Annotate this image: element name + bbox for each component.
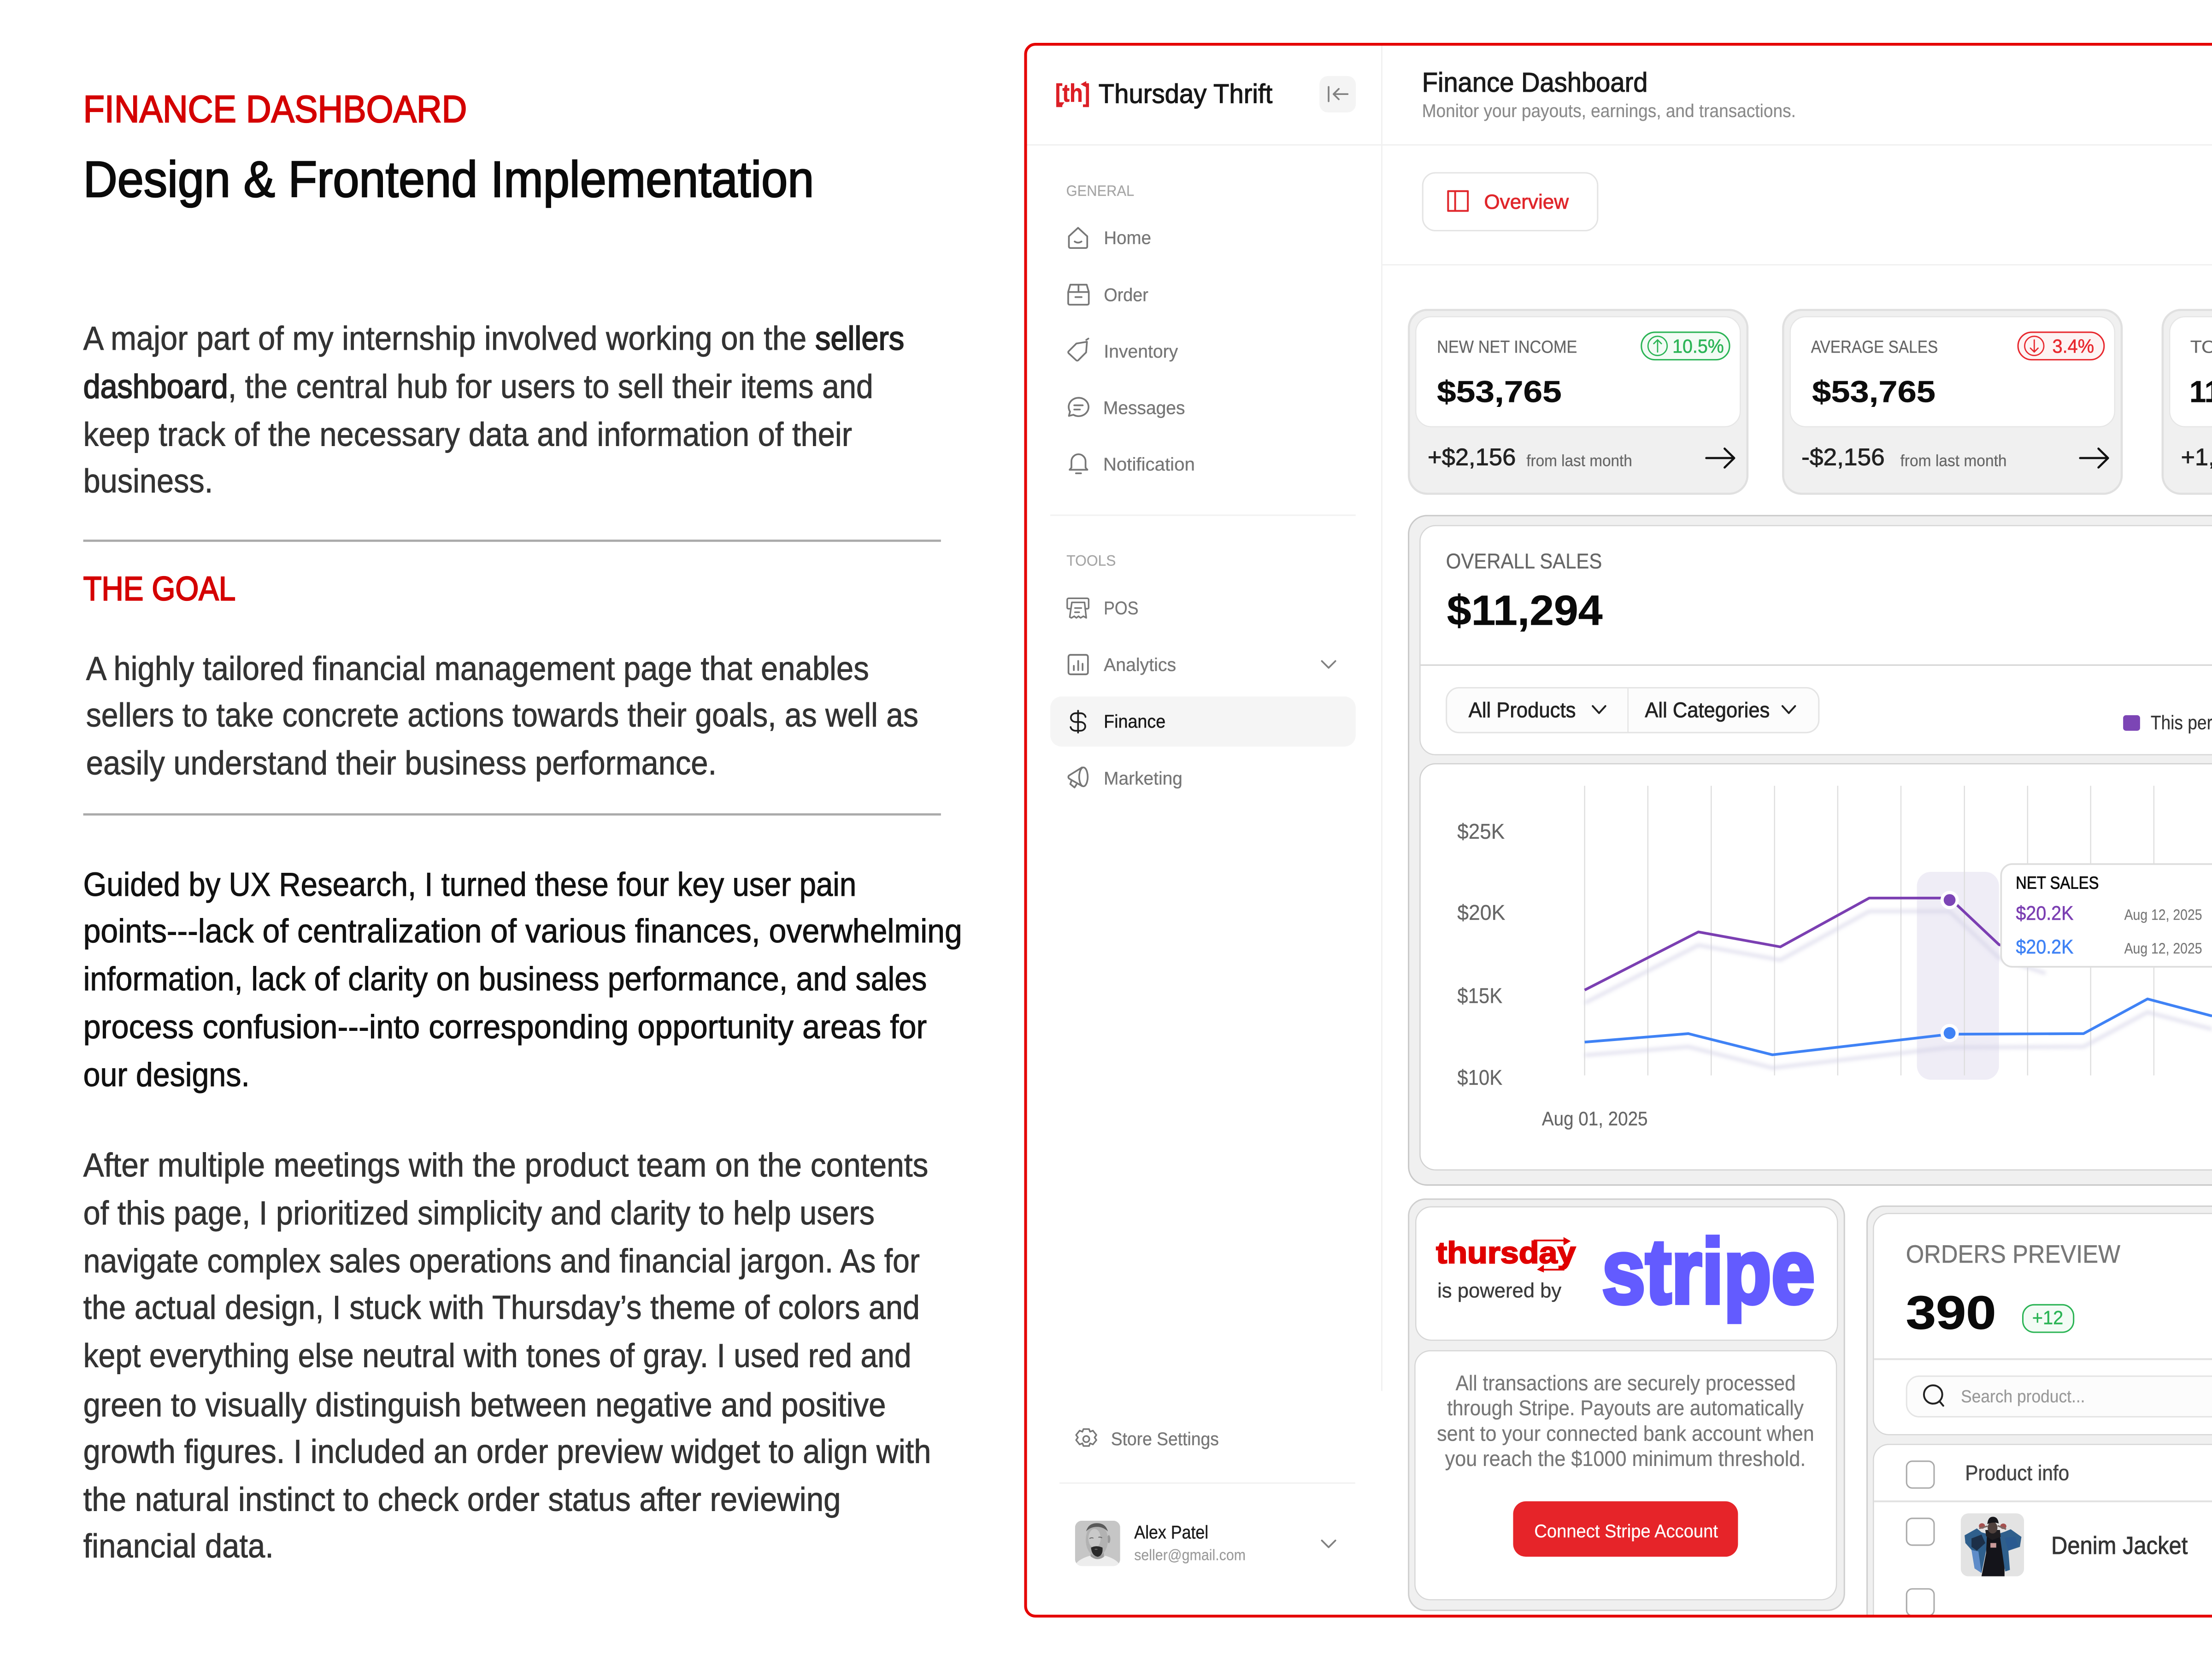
tooltip [2001,864,2212,967]
nav item: Marketing: Marketing [1104,768,1182,788]
orders summary card: ORDERS PREVIEW [1906,1240,2120,1268]
row checkbox [1906,1518,1934,1545]
KPI card: average sales [1783,310,2122,494]
y axis labels: $15K [1457,984,1503,1008]
blue series line [1585,999,2212,1055]
decline badge: 3.4% [2052,335,2094,357]
goal paragraph: easily understand their business performance. [86,745,717,782]
design decisions paragraph: After multiple meetings with the product team on the contents [83,1147,928,1184]
filter dropdowns: All Categories [1645,698,1770,722]
nav item: Finance (active) [1050,696,1356,747]
UX research paragraph [83,866,962,1094]
nav item: Messages: Messages [1103,398,1185,418]
the goal heading: THE GOAL [83,570,235,608]
KPI card: average sales: -$2,156 [1801,444,1885,471]
user profile: Alex Patel [1134,1522,1208,1542]
intro paragraph: business. [83,463,213,500]
general label: GENERAL [1066,182,1134,199]
KPI card: average sales: AVERAGE SALES [1811,337,1938,357]
eyebrow heading: FINANCE DASHBOARD [83,88,467,130]
count badge: +12 [2032,1307,2063,1329]
nav item: Inventory: Inventory [1104,341,1178,362]
page header [1422,67,1796,121]
nav item: POS [1067,598,1138,618]
x axis label: Aug 01, 2025 [1542,1108,1648,1130]
y axis labels: $25K [1457,819,1505,843]
KPI card: average sales: from last month [1900,452,2007,470]
orders table card: Product info [1965,1461,2069,1485]
intro paragraph: keep track of the necessary data and information of their [83,416,852,453]
blue marker [1941,1024,1959,1042]
UX research paragraph: information, lack of clarity on business performance, and sales [83,961,927,998]
connect button [1513,1501,1738,1557]
arrow [1706,448,1734,467]
stripe panel [1409,1199,1844,1610]
design decisions paragraph: the natural instinct to check order status after reviewing [83,1482,841,1518]
growth badge [1641,332,1730,360]
dashboard screenshot frame [1026,44,2212,1636]
user profile: seller@gmail.com [1134,1547,1246,1564]
goal paragraph: sellers to take concrete actions towards their goals, as well as [86,697,918,734]
nav item: Inventory [1068,339,1178,362]
summary card: $11,294 [1447,587,1603,634]
search field: Search product... [1961,1387,2085,1406]
design decisions paragraph: navigate complex sales operations and financial jargon. As for [83,1243,920,1280]
connect button: Connect Stripe Account [1534,1521,1718,1541]
KPI card: third, cropped [2163,310,2212,494]
page header: Monitor your payouts, earnings, and transactions. [1422,101,1796,121]
orders summary card: 390 [1906,1286,1996,1339]
tooltip: $20.2K [2016,936,2074,958]
summary card [1420,526,2212,755]
left column: case study text [83,88,962,1565]
design decisions paragraph: kept everything else neutral with tones of gray. I used red and [83,1337,912,1374]
legend [2123,712,2212,734]
design decisions paragraph: the actual design, I stuck with Thursday’s theme of colors and [83,1289,920,1326]
nav item: Home: Home [1104,228,1151,248]
UX research paragraph: process confusion---into corresponding opportunity areas for [83,1009,927,1046]
nav item: Order: Order [1104,285,1148,306]
nav item: Home [1069,228,1151,248]
y axis labels: $10K [1457,1065,1503,1089]
summary card: OVERALL SALES [1446,549,1602,573]
growth badge: 10.5% [1672,335,1724,357]
thursday logo: thursday [1436,1235,1576,1270]
tooltip: NET SALES [2016,873,2099,893]
KPI card: new net income [1409,310,1747,494]
y axis labels: $20K [1457,900,1506,924]
goal paragraph [86,651,918,782]
UX research paragraph: points---lack of centralization of various finances, overwhelming [83,913,962,950]
payout description: sent to your connected bank account when [1437,1421,1814,1445]
user profile [1075,1521,1335,1567]
payout description: you reach the $1000 minimum threshold. [1445,1447,1806,1471]
stripe payouts card [1415,1351,1836,1600]
KPI card: new net income: +$2,156 [1428,444,1516,471]
nav item: Analytics: Analytics [1104,655,1176,675]
row checkbox [1906,1589,1934,1616]
tooltip: $20.2K [2016,902,2074,924]
UX research paragraph: our designs. [83,1057,250,1094]
orders summary card [1873,1213,2212,1435]
line chart card [1420,764,2212,1170]
tools label: TOOLS [1066,553,1116,569]
main title: Design & Frontend Implementation [83,151,814,208]
highlight band [1917,872,1999,1080]
brand logo: Thursday Thrift [1099,79,1272,109]
collapse button [1319,76,1356,112]
powered by stripe card [1416,1207,1837,1340]
purple series line [1585,898,2046,990]
red frame outline [1026,44,2212,1616]
payout description [1437,1371,1814,1471]
search field [1906,1376,2212,1417]
KPI card: new net income: from last month [1526,452,1632,470]
nav item: POS: POS [1104,598,1138,618]
goal paragraph: A highly tailored financial management page that enables [86,651,869,688]
KPI card: new net income: $53,765 [1437,374,1562,408]
tooltip: Aug 12, 2025 [2124,940,2202,957]
orders table card [1873,1444,2212,1636]
design decisions paragraph: financial data. [83,1528,274,1565]
design decisions paragraph: green to visually distinguish between negative and positive [83,1387,886,1424]
stripe logo: stripe [1602,1221,1815,1323]
UX research paragraph: Guided by UX Research, I turned these four key user pain [83,866,856,903]
count badge [2023,1305,2074,1332]
tooltip: Aug 12, 2025 [2124,906,2202,923]
overview tab: Overview [1484,191,1569,213]
nav item: Marketing [1068,767,1182,788]
KPI card: new net income: NEW NET INCOME [1437,337,1577,357]
arrow [2080,448,2108,467]
filter dropdowns [1447,688,1819,733]
powered by stripe card: is powered by [1437,1280,1562,1302]
brand logo: [th] [1055,78,1090,107]
intro paragraph [83,320,904,500]
page header: Finance Dashboard [1422,67,1648,98]
sidebar [1027,45,2212,1567]
overall sales panel [1409,516,2212,1185]
decline badge [2018,332,2104,360]
purple marker [1941,891,1959,909]
filter dropdowns: All Products [1469,698,1576,722]
payout description: All transactions are securely processed [1456,1371,1796,1395]
design decisions paragraph [83,1147,931,1565]
y axis labels [1457,819,1506,1089]
KPI card: average sales: $53,765 [1812,374,1936,408]
nav item: Notification: Notification [1103,454,1195,475]
nav item: Order [1068,285,1148,306]
nav item: Messages [1069,398,1185,418]
payout description: through Stripe. Payouts are automatically [1447,1396,1804,1420]
avatar photo [1075,1521,1121,1567]
nav item: Analytics [1069,655,1335,675]
nav item: Finance (active): Finance [1104,712,1165,732]
overview tab [1423,173,1598,231]
product photo: denim jacket [1961,1513,2024,1577]
header checkbox [1906,1461,1934,1488]
store settings link: Store Settings [1111,1429,1219,1449]
design decisions paragraph: of this page, I prioritized simplicity and clarity to help users [83,1195,875,1232]
design decisions paragraph: growth figures. I included an order preview widget to align with [83,1433,931,1470]
orders preview panel [1867,1206,2212,1636]
orders table card: Denim Jacket [2051,1532,2188,1559]
intro paragraph: A major part of my internship involved working on the sellers [83,320,904,357]
intro paragraph: dashboard, the central hub for users to sell their items and [83,368,873,405]
